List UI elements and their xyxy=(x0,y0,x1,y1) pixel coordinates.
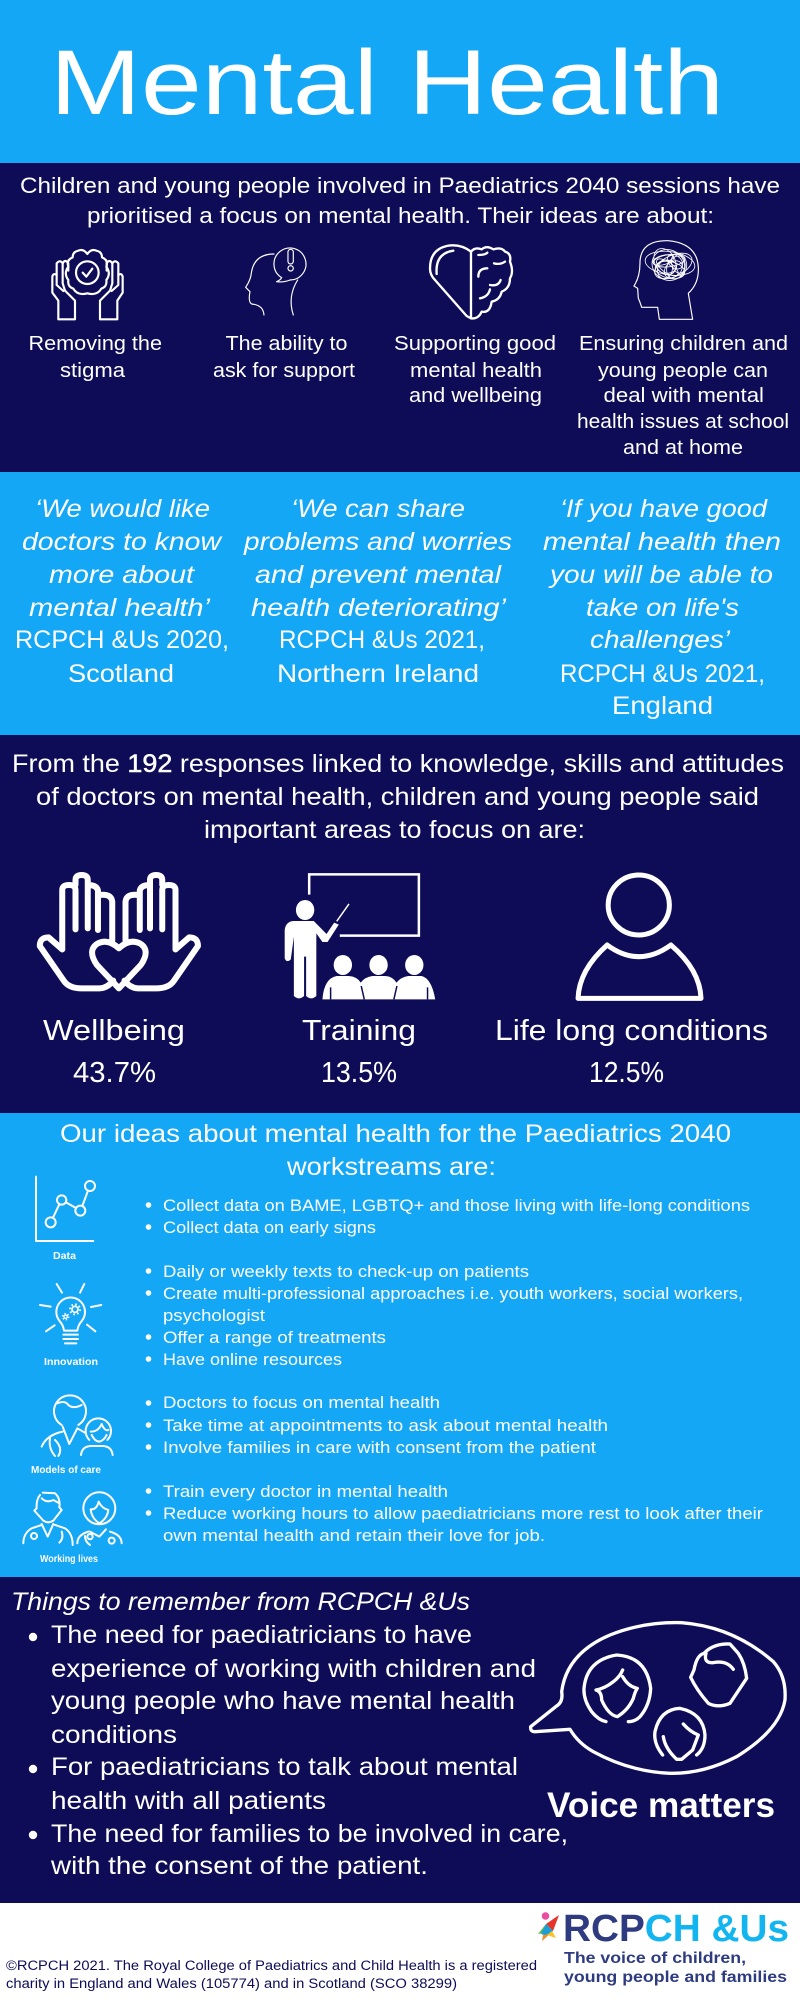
label: voice matters: Voice matters xyxy=(547,1786,775,1825)
list: models of care ideas: Doctors to focus on mental health xyxy=(163,1394,440,1412)
list: working lives ideas: Train every doctor in mental health xyxy=(163,1483,448,1501)
label: removing the stigma: stigma xyxy=(60,360,126,382)
label: ensuring children can deal: young people can xyxy=(598,360,768,382)
icon: doctor and patient xyxy=(42,1395,113,1456)
workstream: working lives xyxy=(23,1483,764,1565)
quote: Scotland: Scotland xyxy=(68,660,174,688)
quote: England: England xyxy=(612,692,713,720)
list: things to remember xyxy=(29,1621,568,1880)
label: wellbeing stat: 43.7% xyxy=(73,1057,156,1089)
panel: children's ideas xyxy=(0,163,800,472)
quote: Scotland: doctors to know xyxy=(22,528,223,556)
intro text: From the 192 responses linked to knowledge, skills and attitudes xyxy=(12,750,784,778)
heading xyxy=(60,1120,731,1181)
workstream: innovation: Innovation xyxy=(44,1356,98,1368)
logo: RCPCH &Us xyxy=(538,1908,789,1986)
workstream: data xyxy=(36,1177,750,1262)
list: things to remember: health with all patients xyxy=(51,1787,326,1815)
icon: teacher and students xyxy=(285,874,435,999)
quote: Scotland: ‘We would like xyxy=(35,495,210,523)
list: models of care ideas xyxy=(146,1394,608,1457)
icon: head with speech bubble exclamation xyxy=(246,248,306,315)
list: things to remember: experience of working with children and xyxy=(51,1655,536,1683)
list: working lives ideas: Reduce working hours to allow paediatricians more rest to look after their xyxy=(163,1505,764,1523)
quote: Northern Ireland: RCPCH &Us 2021, xyxy=(279,626,485,654)
list: innovation ideas: Have online resources xyxy=(163,1351,342,1369)
quote: Scotland: RCPCH &Us 2020, xyxy=(15,626,229,654)
intro text: prioritised a focus on mental health. Their ideas are about: xyxy=(87,203,714,228)
list: models of care ideas: Involve families in care with consent from the patient xyxy=(163,1439,596,1457)
list: things to remember: For paediatricians to talk about mental xyxy=(51,1753,518,1781)
panel: quotes xyxy=(0,472,800,735)
label: ensuring children can deal: health issues at school xyxy=(577,411,789,433)
workstream: models of care: Models of care xyxy=(31,1464,101,1476)
label: supporting good mental health xyxy=(394,333,556,407)
heading: workstreams are: xyxy=(286,1153,496,1181)
quote: Northern Ireland: Northern Ireland xyxy=(277,660,479,688)
quote: Scotland xyxy=(15,495,229,688)
label: training stat: Training xyxy=(302,1015,416,1047)
copyright text: charity in England and Wales (105774) and in Scotland (SCO 38299) xyxy=(6,1976,457,1991)
label: wellbeing stat: Wellbeing xyxy=(43,1015,185,1047)
list: data ideas xyxy=(146,1197,750,1237)
icon: coloured star figure xyxy=(538,1912,559,1941)
icon: two doctors xyxy=(23,1492,122,1545)
quote: England: challenges’ xyxy=(590,626,730,654)
label: life long conditions stat: Life long conditions xyxy=(495,1015,768,1047)
quote: Scotland: more about xyxy=(49,561,195,589)
label: ensuring children can deal xyxy=(577,333,789,459)
list: data ideas: Collect data on BAME, LGBTQ+ and those living with life-long conditions xyxy=(163,1197,750,1215)
quote: England: take on life's xyxy=(586,594,739,622)
label: wellbeing stat xyxy=(43,1015,185,1089)
icon: line chart xyxy=(36,1177,95,1241)
icon: speech bubble with faces xyxy=(531,1623,785,1773)
list: innovation ideas: psychologist xyxy=(163,1307,265,1325)
list: models of care ideas: Take time at appointments to ask about mental health xyxy=(163,1417,608,1435)
workstream: working lives: Working lives xyxy=(40,1553,98,1565)
icon: hands holding heart xyxy=(40,875,198,988)
label: ensuring children can deal: deal with mental xyxy=(604,385,764,407)
list: working lives ideas xyxy=(146,1483,764,1545)
label: supporting good mental health: and wellbeing xyxy=(409,385,542,407)
label: removing the stigma: Removing the xyxy=(28,333,162,355)
list: working lives ideas: own mental health and retain their love for job. xyxy=(163,1527,545,1545)
icon: person outline xyxy=(578,875,701,998)
list: things to remember: The need for paediatricians to have xyxy=(51,1621,472,1649)
intro text: important areas to focus on are: xyxy=(204,816,585,844)
quote: Northern Ireland: ‘We can share xyxy=(291,495,465,523)
logo strapline: young people and families xyxy=(564,1969,787,1986)
heading: Our ideas about mental health for the Paediatrics 2040 xyxy=(60,1120,731,1148)
label: training stat: 13.5% xyxy=(321,1057,397,1089)
quote: England: you will be able to xyxy=(548,561,773,589)
list: things to remember: young people who have mental health xyxy=(51,1687,515,1715)
list: innovation ideas: Offer a range of treatments xyxy=(163,1329,386,1347)
label: ability to ask for support xyxy=(213,333,355,382)
intro text: Children and young people involved in Paediatrics 2040 sessions have xyxy=(20,173,780,198)
quote: England: ‘If you have good xyxy=(560,495,768,523)
list: things to remember: The need for families to be involved in care, xyxy=(51,1820,568,1848)
icon: hands holding gear with check xyxy=(52,250,123,319)
list: data ideas: Collect data on early signs xyxy=(163,1219,376,1237)
label: removing the stigma xyxy=(28,333,162,382)
workstream: innovation xyxy=(40,1263,743,1369)
label: life long conditions stat xyxy=(495,1015,768,1089)
panel: focus areas xyxy=(0,735,800,1113)
workstream: models of care xyxy=(31,1394,608,1476)
quote: England: mental health then xyxy=(543,528,781,556)
intro text xyxy=(20,173,780,228)
quote: Northern Ireland xyxy=(243,495,512,688)
copyright text: ©RCPCH 2021. The Royal College of Paediatrics and Child Health is a registered xyxy=(6,1958,537,1973)
panel: title banner xyxy=(0,0,800,163)
intro text: of doctors on mental health, children and young people said xyxy=(36,783,759,811)
heading: Things to remember from RCPCH &Us xyxy=(11,1588,470,1616)
workstream: data: Data xyxy=(53,1250,76,1262)
quote: England: RCPCH &Us 2021, xyxy=(560,660,765,688)
quote: Northern Ireland: and prevent mental xyxy=(255,561,503,589)
logo wordmark: RCPCH &Us xyxy=(563,1908,789,1950)
icon: light bulb with gears xyxy=(40,1284,101,1343)
list: innovation ideas: Create multi-professional approaches i.e. youth workers, social workers, xyxy=(163,1285,743,1303)
icon: half heart half brain xyxy=(430,245,512,318)
logo strapline xyxy=(564,1950,787,1986)
label: supporting good mental health: Supporting good xyxy=(394,333,556,355)
label: ability to ask for support: The ability to xyxy=(226,333,348,355)
list: things to remember: with the consent of the patient. xyxy=(50,1852,428,1880)
panel: workstream ideas xyxy=(0,1113,800,1577)
icon: head with tangled scribble xyxy=(634,241,698,319)
panel: footer xyxy=(0,1903,800,2000)
quote: Northern Ireland: problems and worries xyxy=(243,528,512,556)
list: innovation ideas: Daily or weekly texts to check-up on patients xyxy=(163,1263,529,1281)
list: innovation ideas xyxy=(146,1263,743,1369)
label: life long conditions stat: 12.5% xyxy=(589,1057,664,1089)
quote: Scotland: mental health’ xyxy=(29,594,211,622)
quote: England xyxy=(543,495,781,720)
label: ability to ask for support: ask for support xyxy=(213,360,355,382)
panel: things to remember xyxy=(0,1577,800,1903)
label: ensuring children can deal: Ensuring children and xyxy=(579,333,788,355)
quote: Northern Ireland: health deteriorating’ xyxy=(251,594,507,622)
copyright text xyxy=(6,1958,537,1991)
intro text xyxy=(12,750,784,844)
title: Mental Health xyxy=(50,32,724,134)
label: training stat xyxy=(302,1015,416,1089)
logo strapline: The voice of children, xyxy=(564,1950,746,1967)
label: ensuring children can deal: and at home xyxy=(623,437,743,459)
label: supporting good mental health: mental health xyxy=(410,360,542,382)
list: things to remember: conditions xyxy=(51,1721,177,1749)
